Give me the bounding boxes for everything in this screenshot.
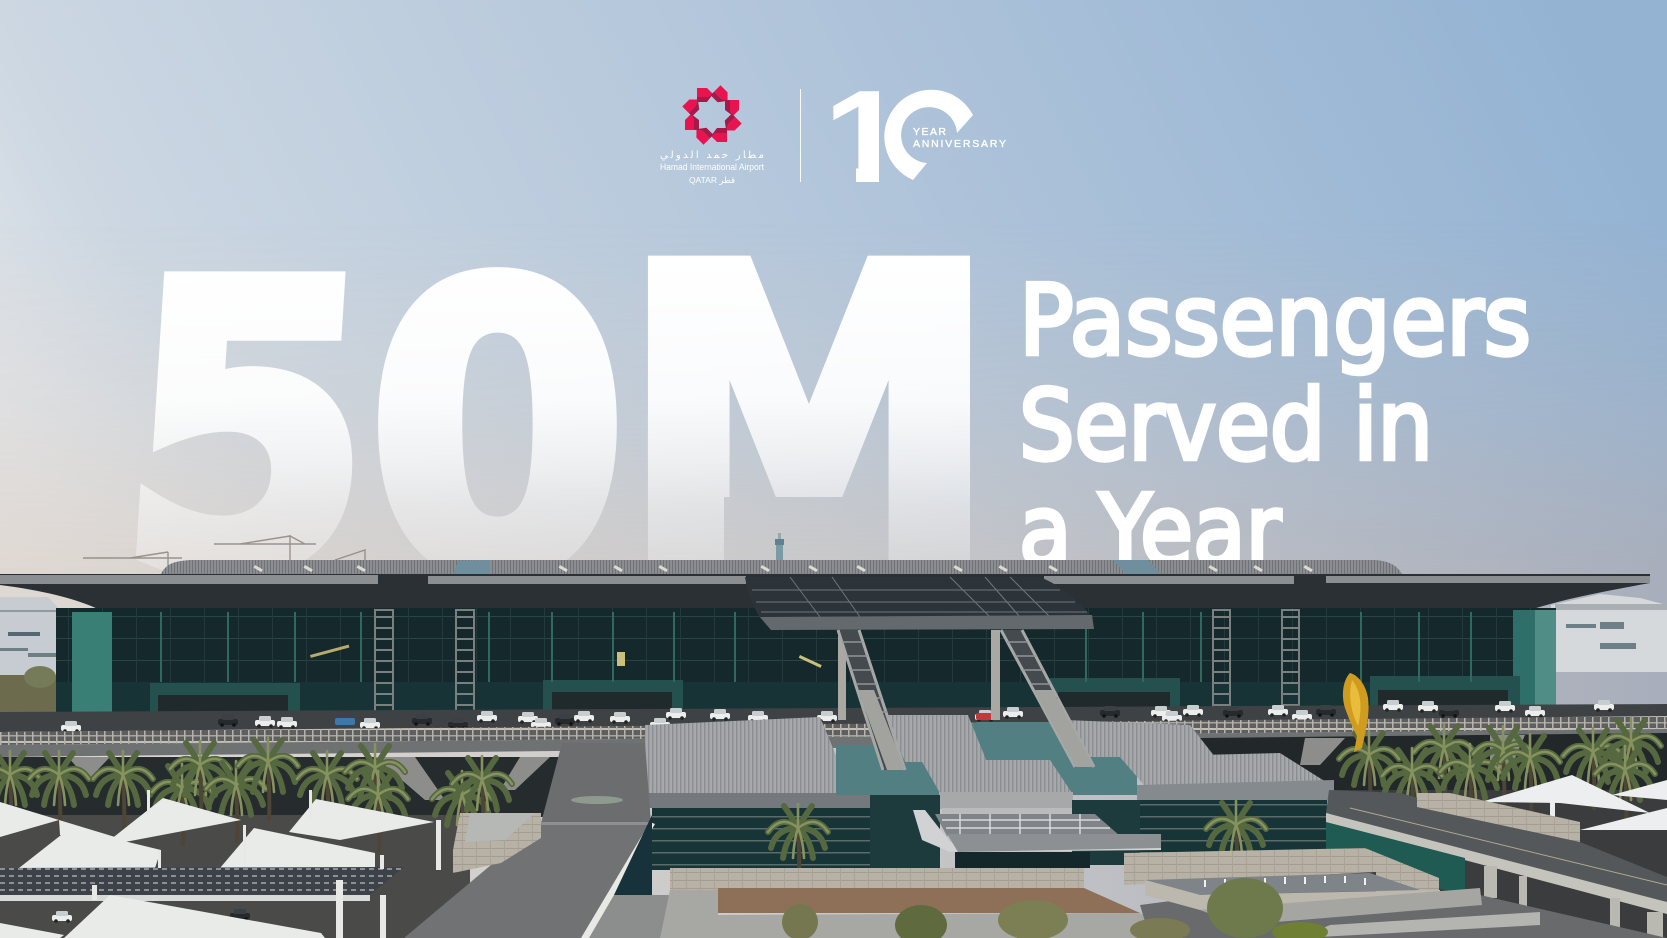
- palms right: [1339, 718, 1661, 830]
- airport name in Arabic: مطار حمد الدولي: [660, 150, 764, 161]
- right fascia: [1137, 780, 1334, 806]
- teal glass roof: [836, 722, 1137, 795]
- gravel bed: [718, 888, 1140, 913]
- golden falcon sculpture: [1343, 673, 1369, 752]
- landscaped stone plaza: [660, 848, 1667, 938]
- central arched glass canopy: [745, 577, 1094, 630]
- right glazing: [1140, 800, 1327, 862]
- terminal canopy soffit: [0, 574, 1650, 610]
- Qatar label: QATAR قطر: [689, 175, 735, 185]
- roadway bridge deck: [0, 729, 1667, 757]
- plaza low wall: [660, 890, 1150, 938]
- headline text: a Year: [1019, 474, 1281, 587]
- under-bridge shadow right: [1200, 733, 1667, 790]
- right ground: [1330, 790, 1667, 938]
- entrance canopy: [913, 810, 1161, 852]
- roof panel centre top: [885, 715, 987, 762]
- lower shade sail: [0, 895, 325, 938]
- headline number 50M: 5: [108, 201, 388, 662]
- ground beside walkway: [589, 895, 670, 938]
- walkway left: [404, 743, 655, 938]
- under-bridge shadow left: [0, 757, 560, 817]
- numeral 1: 1: [823, 63, 907, 211]
- headline text: Served in: [1019, 369, 1433, 482]
- background trees left: [0, 666, 62, 713]
- dark glass under walkway: [614, 815, 652, 895]
- lower dark ground: [1140, 880, 1667, 938]
- ANNIVERSARY label: ANNIVERSARY: [913, 138, 1006, 150]
- headline text: Passengers: [1019, 264, 1531, 377]
- foreground shrubs: [782, 878, 1328, 938]
- lower parked cars: [52, 909, 250, 923]
- YEAR label: YEAR: [913, 126, 946, 138]
- left ground: [0, 815, 470, 938]
- roof panel centre lower: [921, 760, 1072, 793]
- canopy ladder legs: [838, 630, 1094, 770]
- left fascia: [645, 793, 870, 808]
- glass facade: [56, 608, 1556, 714]
- icon: red octagonal star: [682, 85, 742, 145]
- centre glazing: [870, 795, 940, 870]
- low roof left: [645, 717, 840, 793]
- fountain pool: [1145, 873, 1420, 895]
- walkway columns: [1484, 866, 1663, 938]
- upper roadway: [0, 704, 1667, 732]
- control tower: [775, 533, 784, 564]
- fountain walls: [1124, 848, 1439, 900]
- background building right: [1551, 594, 1667, 672]
- background building left: [0, 597, 60, 682]
- cars on roadway: [61, 700, 1614, 733]
- airport name in English: Hamad International Airport: [660, 162, 764, 173]
- logo: Hamad International Airport: [660, 85, 764, 185]
- left glazing: [652, 808, 870, 870]
- headline number 50M: [136, 256, 970, 570]
- stone box: [453, 813, 541, 873]
- centre fascia: [939, 792, 1073, 809]
- lower-left parking shade sails: [0, 798, 434, 868]
- canopy fascia strips: [0, 575, 1650, 584]
- shade sail poles: [92, 790, 441, 938]
- right shade sails: [1481, 775, 1667, 830]
- roof panel right top: [1065, 720, 1215, 757]
- right walkway: [1326, 790, 1667, 914]
- numeral 0 ring: [884, 90, 973, 180]
- roof panel right lower: [1120, 753, 1334, 792]
- headline text: [1019, 264, 1531, 587]
- headline number 50M: M: [620, 182, 998, 659]
- facade ladder columns: [375, 610, 1299, 712]
- logo: 10 year anniversary: [833, 90, 1006, 182]
- headline number 50M: 0: [367, 202, 628, 664]
- roadway railing: [0, 716, 1667, 745]
- canopy support columns: [838, 630, 1000, 720]
- bridge supports: [68, 735, 1525, 800]
- construction cranes: [83, 535, 365, 572]
- central terminal building: [645, 715, 1334, 870]
- palms left: [0, 738, 512, 853]
- solar panel shade: [0, 867, 404, 901]
- stone wall: [670, 868, 1084, 890]
- plaza steps: [1200, 888, 1482, 925]
- terminal curved roof: [161, 560, 1402, 574]
- central palm trees: [768, 801, 1266, 886]
- logo divider: [800, 89, 801, 182]
